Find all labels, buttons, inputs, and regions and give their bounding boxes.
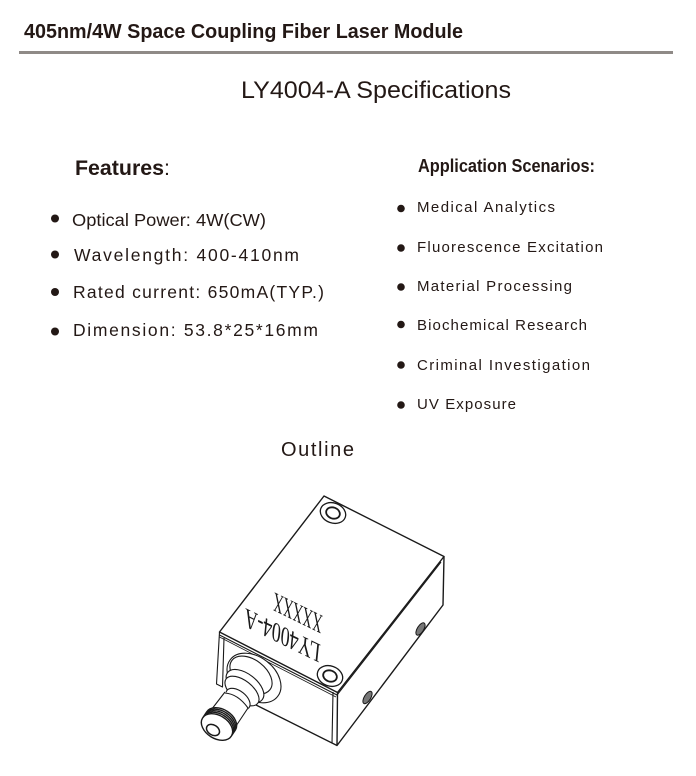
title: 405nm/4W Space Coupling Fiber Laser Module	[24, 21, 463, 43]
application: fluorescence excitation: Fluorescence Excitation	[417, 239, 603, 256]
module body	[216, 496, 444, 746]
application: uv exposure: UV Exposure	[417, 396, 516, 413]
features heading: Features:	[75, 157, 170, 180]
feature: optical power: Optical Power: 4W(CW)	[72, 210, 266, 230]
engraved model text: XXXXX	[272, 586, 324, 640]
application: material processing: Material Processing	[417, 278, 572, 295]
mounting hole: front	[314, 662, 346, 690]
features panel	[51, 157, 324, 340]
application scenarios panel	[397, 156, 603, 413]
feature: wavelength: Wavelength: 400-410nm	[74, 245, 299, 265]
application: biochemical research: Biochemical Research	[417, 317, 587, 334]
fiber connector	[196, 643, 291, 746]
application: medical analytics: Medical Analytics	[417, 199, 555, 216]
outline heading: Outline	[281, 439, 354, 461]
side screw holes	[361, 621, 427, 705]
engraved model text: LY4004-A	[243, 602, 322, 669]
header rule	[19, 51, 673, 54]
module outline drawing	[196, 496, 444, 746]
application: criminal investigation: Criminal Investigation	[417, 357, 590, 374]
subtitle: LY4004-A Specifications	[241, 77, 511, 104]
mounting hole: rear	[317, 499, 349, 527]
applications heading: Application Scenarios:	[418, 156, 595, 176]
feature: dimension: Dimension: 53.8*25*16mm	[73, 320, 318, 340]
feature: rated current: Rated current: 650mA(TYP.)	[73, 282, 324, 302]
